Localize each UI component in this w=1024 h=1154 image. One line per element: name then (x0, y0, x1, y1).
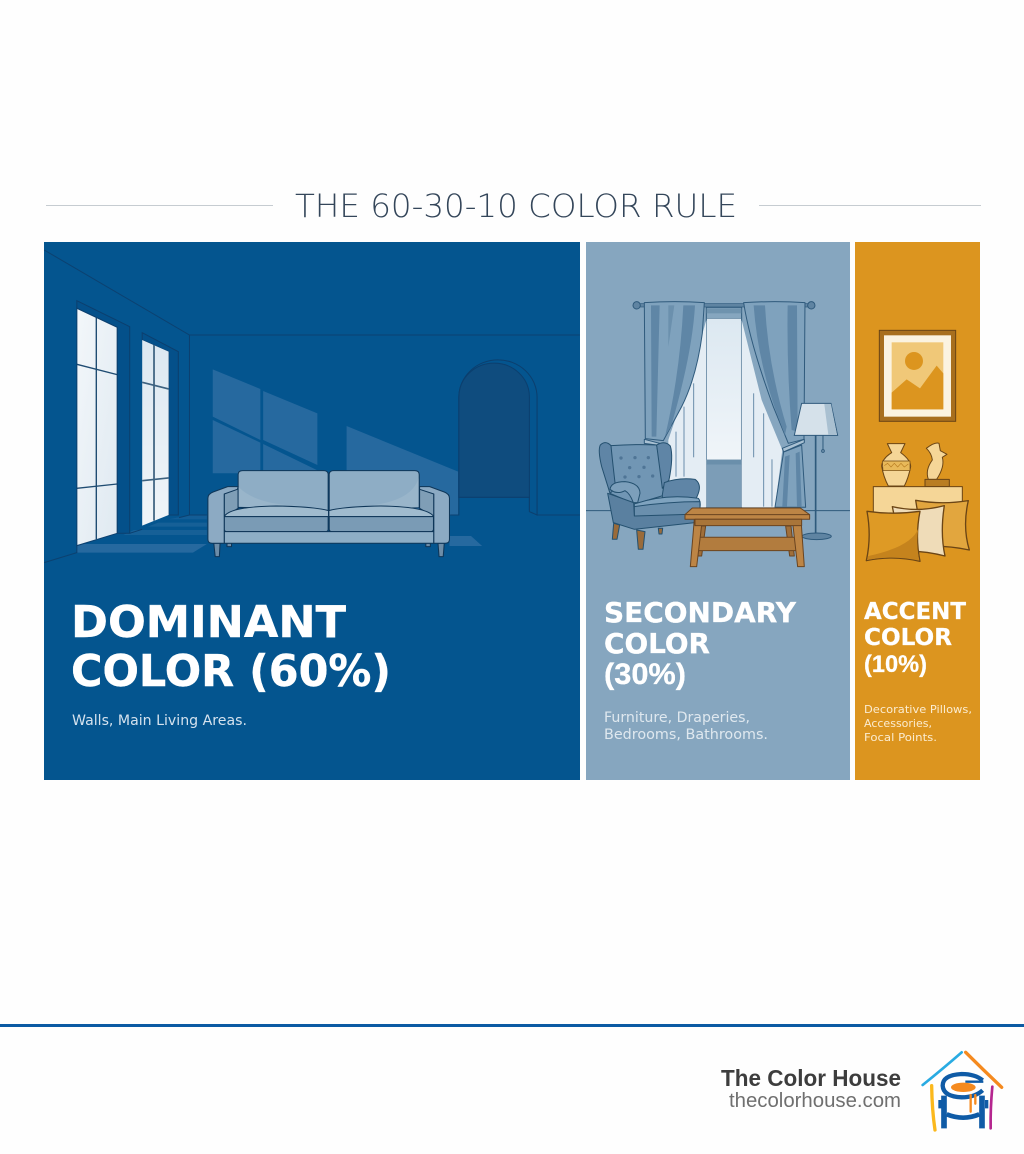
brand name and URL: The Color House (721, 1065, 901, 1091)
framed picture (879, 330, 956, 421)
room outlines (44, 250, 580, 563)
floor lamp (794, 403, 838, 540)
sofa (208, 471, 449, 557)
pillows (866, 500, 969, 561)
illustration: living room with sofa (44, 250, 580, 563)
heading: accent color: ACCENT (864, 599, 966, 625)
heading: accent color: (10%) (864, 651, 927, 678)
vase (882, 444, 911, 486)
heading: secondary color: (30%) (604, 658, 686, 691)
description: secondary (604, 710, 768, 743)
heading: dominant color: DOMINANT (71, 597, 346, 648)
tall window 1 (77, 301, 130, 546)
statue (925, 443, 949, 487)
panel: secondary color 30% (586, 242, 850, 780)
description: secondary: Bedrooms, Bathrooms. (604, 727, 768, 743)
panel: dominant color 60% (44, 242, 580, 780)
heading: secondary color (604, 596, 797, 691)
brand name and URL: thecolorhouse.com (729, 1090, 901, 1112)
curtain rod (633, 302, 815, 309)
sunlight patches on wall and floor (77, 369, 482, 553)
heading: dominant color (71, 597, 391, 697)
description: dominant: Walls, Main Living Areas. (72, 713, 247, 729)
heading: secondary color: SECONDARY (604, 596, 797, 629)
arched doorway (459, 360, 537, 515)
armchair (599, 443, 700, 549)
description: accent (864, 703, 972, 744)
brand name and URL (721, 1065, 901, 1112)
floor line (586, 509, 850, 512)
window (706, 307, 742, 507)
description: accent: Decorative Pillows, (864, 703, 972, 716)
footer rule (0, 1024, 1024, 1027)
right curtain (744, 302, 806, 507)
coffee table (685, 508, 810, 567)
heading: secondary color: COLOR (604, 627, 710, 660)
console shelf (873, 487, 962, 520)
illustration: framed art, vase, statue and pillows (866, 330, 969, 561)
description: accent: Accessories, (864, 717, 932, 730)
left curtain (644, 302, 704, 446)
heading: dominant color: COLOR (60%) (71, 646, 391, 697)
tall window 2 (142, 333, 178, 526)
sheer panels (668, 320, 782, 507)
wall edge between windows (130, 529, 142, 533)
description: accent: Focal Points. (864, 731, 937, 744)
heading: accent color (864, 599, 966, 678)
heading: accent color: COLOR (864, 625, 952, 651)
logo: paint can house (923, 1052, 1002, 1130)
illustration: curtains, armchair, lamp and table (586, 302, 850, 567)
description: secondary: Furniture, Draperies, (604, 710, 750, 726)
title with side rules: THE 60-30-10 COLOR RULE (295, 187, 737, 225)
panel: accent color 10% (855, 242, 980, 780)
